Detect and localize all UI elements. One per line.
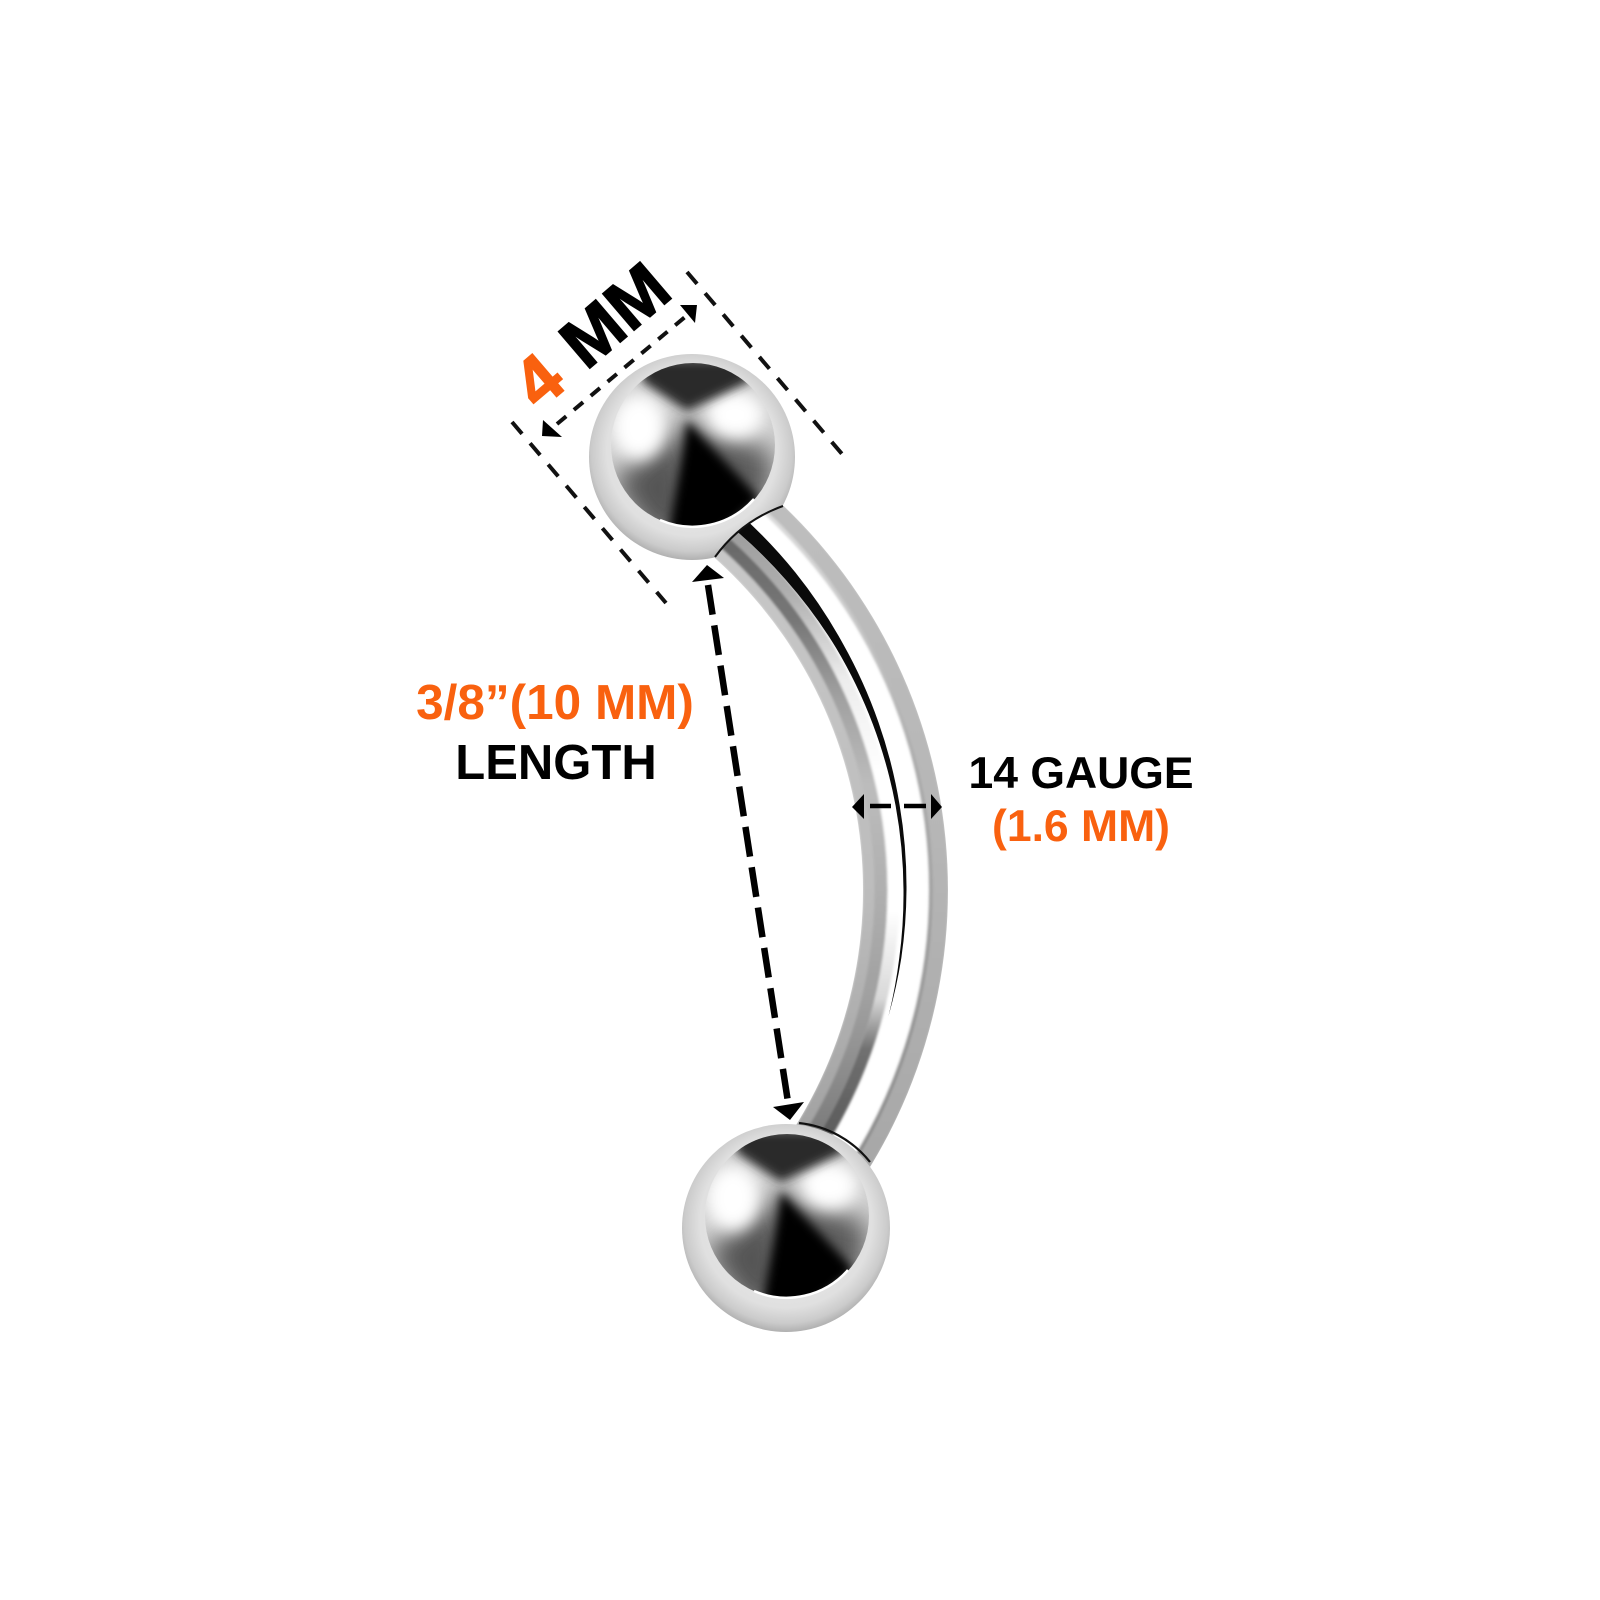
length label bbox=[416, 675, 694, 790]
length measurement arrow bbox=[692, 565, 804, 1120]
bottom ball bead bbox=[682, 1124, 890, 1332]
curved barbell shaft bbox=[714, 506, 948, 1167]
ball size measurement: guide lines and arrow bbox=[512, 272, 842, 603]
top ball seam bbox=[715, 506, 783, 557]
top ball bead bbox=[589, 354, 795, 560]
length label: LENGTH bbox=[455, 736, 657, 790]
bottom ball seam bbox=[799, 1123, 870, 1162]
gauge label: (1.6 MM) bbox=[992, 802, 1170, 851]
gauge label: 14 GAUGE bbox=[968, 749, 1194, 798]
gauge label bbox=[968, 749, 1194, 851]
gauge measurement arrow bbox=[852, 794, 942, 819]
ball size label: 4 MM: 4MM bbox=[498, 248, 685, 423]
length label: 3/8”(10 MM) bbox=[416, 675, 694, 730]
